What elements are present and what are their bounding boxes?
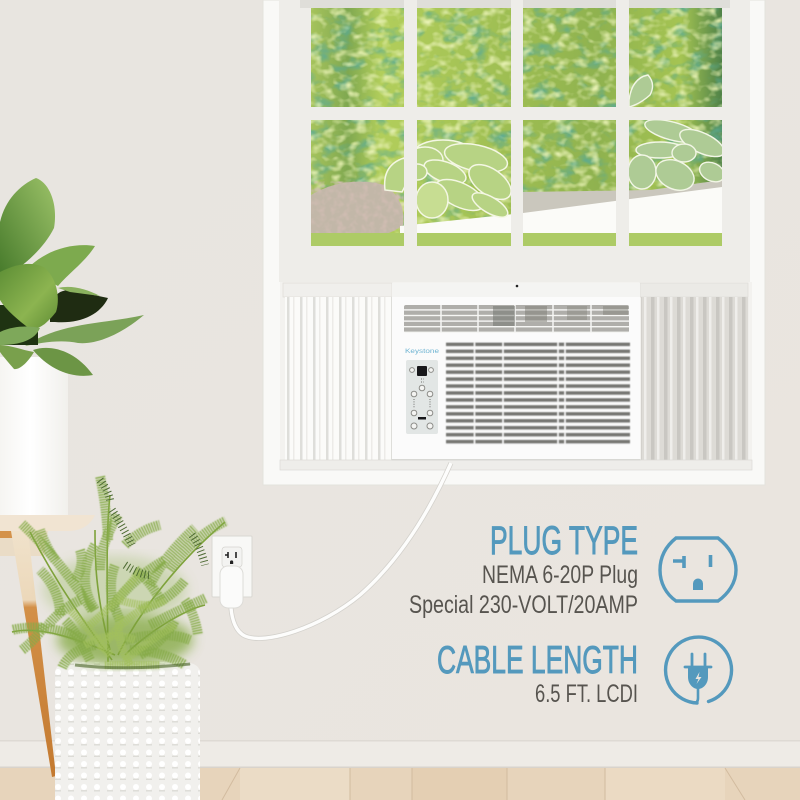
bottom rail — [280, 460, 752, 470]
receptacle — [222, 547, 242, 567]
window — [263, 0, 765, 485]
white path — [400, 187, 722, 233]
pink shrub — [311, 182, 404, 233]
subtext: length value: 6.5 FT. LCDI — [535, 680, 638, 708]
fern fronds — [12, 476, 226, 668]
window muntins — [300, 0, 730, 250]
leaf: long streak — [25, 315, 144, 346]
soil shadow — [75, 664, 190, 668]
hosta left — [385, 139, 517, 222]
brand logo: Keystone — [405, 349, 440, 355]
air conditioner — [392, 283, 640, 460]
grass — [311, 233, 722, 246]
plug body — [220, 566, 243, 608]
subtext: NEMA plug: NEMA 6-20P Plug — [482, 561, 638, 589]
text block: plug type — [409, 519, 638, 619]
leaf: upper right — [30, 245, 95, 286]
leafy plant — [0, 178, 144, 376]
front leg — [11, 531, 56, 777]
power cable — [231, 463, 451, 638]
fern bright fronds — [70, 570, 175, 665]
heading: plug type: PLUG TYPE — [490, 519, 638, 563]
icon: outlet — [660, 538, 736, 601]
fern mass — [57, 614, 193, 666]
hosta right — [629, 74, 722, 191]
wall outlet with plug — [212, 536, 252, 608]
leaf: lower left — [0, 345, 34, 369]
baseboard — [0, 740, 800, 768]
wood floor — [0, 768, 800, 800]
subtext: voltage and amperage: Special 230-VOLT/20AMP — [409, 591, 638, 619]
text block: cable length — [437, 639, 638, 708]
leaf: big round — [0, 264, 58, 329]
window frame — [263, 0, 765, 485]
heading: cable length: CABLE LENGTH — [437, 639, 638, 682]
icon: power plug — [666, 637, 732, 703]
leaf: big top — [0, 178, 55, 280]
white vase — [0, 357, 68, 515]
table — [0, 515, 95, 777]
fern stems — [12, 495, 225, 662]
unit body — [392, 283, 640, 460]
control panel — [406, 360, 438, 434]
back leg and apron — [0, 530, 48, 556]
leaf: lower right — [33, 348, 93, 376]
top vent — [404, 305, 629, 333]
fern dark accents — [100, 480, 205, 575]
fern — [12, 476, 226, 668]
ceramic pot — [55, 662, 200, 800]
leaf: dark — [50, 290, 108, 322]
front grille — [446, 342, 630, 445]
table top — [0, 515, 95, 531]
dark heart of plant — [0, 305, 38, 345]
stone edge — [523, 180, 722, 216]
garden view through panes — [311, 8, 728, 246]
air conditioner side panels — [280, 282, 752, 462]
